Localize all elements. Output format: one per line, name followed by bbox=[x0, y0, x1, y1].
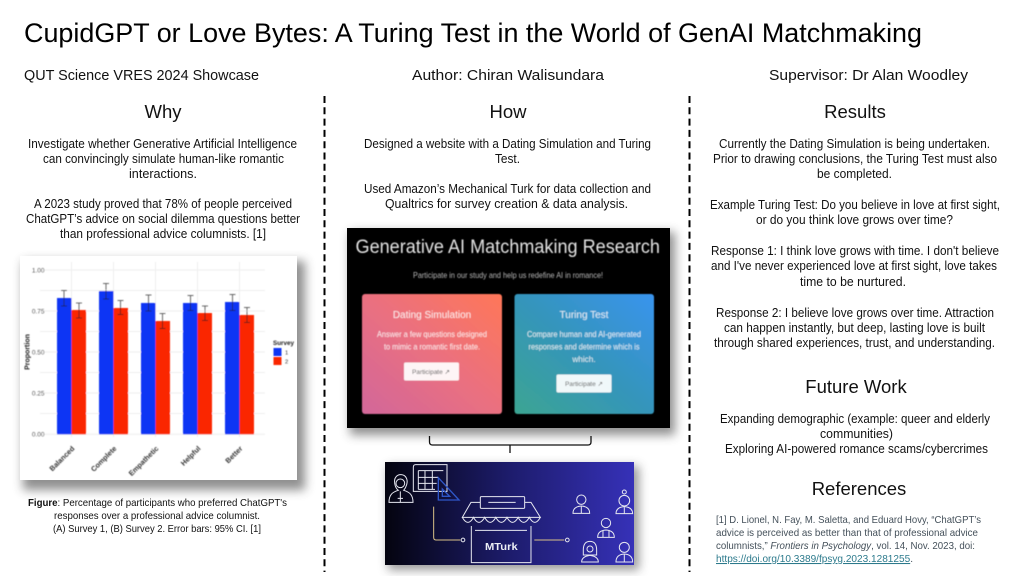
text: reference bbox=[716, 514, 981, 565]
legend: Survey bbox=[273, 340, 295, 347]
x axis labels: Balanced bbox=[47, 444, 76, 473]
connector right bbox=[534, 538, 564, 541]
text: future work bbox=[720, 411, 991, 456]
figure caption: (A) Survey 1, (B) Survey 2. Error bars: 95% CI. [1] bbox=[53, 524, 261, 535]
divider left bbox=[324, 96, 326, 572]
header: showcase: QUT Science VRES 2024 Showcase bbox=[24, 67, 259, 84]
connector left bbox=[434, 507, 460, 540]
text: reference: advice is perceived as better than that of professional advice bbox=[716, 527, 978, 539]
card: turing test: responses and determine which is bbox=[528, 342, 640, 352]
text: results: and I've never experienced love at first sight, love takes bbox=[711, 258, 997, 273]
gridlines bbox=[40, 262, 265, 437]
bars: survey 2 bbox=[72, 308, 254, 434]
header: supervisor: Supervisor: Dr Alan Woodley bbox=[769, 67, 969, 84]
heading: future work: Future Work bbox=[805, 376, 907, 397]
text: future work: communities) bbox=[820, 426, 893, 441]
x axis labels bbox=[47, 444, 245, 478]
card: dating simulation: to mimic a romantic first date. bbox=[384, 342, 480, 352]
card: dating simulation: Answer a few questions designed bbox=[377, 330, 487, 339]
icon: set square bbox=[438, 478, 459, 500]
text: how: Qualtrics for survey creation & data analysis. bbox=[385, 196, 628, 211]
y axis labels: 0.75 bbox=[32, 308, 45, 315]
divider right bbox=[688, 96, 690, 572]
legend: 1 bbox=[285, 350, 288, 356]
x axis labels: Better bbox=[223, 444, 245, 465]
text: why: than professional advice columnists. [1] bbox=[60, 226, 266, 241]
website title: Generative AI Matchmaking Research bbox=[356, 237, 660, 258]
figure caption bbox=[28, 498, 287, 535]
heading: references: References bbox=[812, 478, 906, 499]
y axis labels: 0.50 bbox=[32, 350, 45, 356]
heading: why: Why bbox=[144, 101, 182, 122]
x axis labels: Empathetic bbox=[127, 444, 160, 478]
card: dating simulation: Dating Simulation bbox=[393, 310, 471, 321]
legend bbox=[273, 340, 295, 366]
text: results: Prior to drawing conclusions, the Turing Test must also bbox=[713, 151, 997, 166]
figure caption: Figure: Percentage of participants who preferred ChatGPT's bbox=[28, 498, 287, 509]
x axis labels: Complete bbox=[89, 444, 118, 474]
text: results: Currently the Dating Simulation is being undertaken. bbox=[719, 136, 990, 151]
text: future work: Expanding demographic (example: queer and elderly bbox=[720, 411, 991, 426]
text: results: Response 2: I believe love grows over time. Attraction bbox=[716, 305, 994, 320]
y axis title: Proportion bbox=[24, 334, 32, 370]
card: turing test: Turing Test bbox=[560, 310, 609, 321]
legend: 2 bbox=[285, 360, 288, 366]
bracket bbox=[430, 436, 591, 453]
text: reference: columnists,” Frontiers in Psychology, vol. 14, Nov. 2023, doi: bbox=[716, 540, 975, 552]
text: why: can convincingly simulate human-like romantic bbox=[43, 151, 285, 166]
heading: results: Results bbox=[824, 101, 886, 122]
icon: blueprint bbox=[413, 465, 447, 491]
title: CupidGPT or Love Bytes: A Turing Test in the World of GenAI Matchmaking bbox=[24, 18, 922, 48]
panel: website screenshot bbox=[347, 228, 675, 435]
card: dating simulation: Participate ↗ bbox=[412, 369, 450, 376]
text: why: Investigate whether Generative Artificial Intelligence bbox=[28, 136, 297, 151]
text: results bbox=[710, 136, 1000, 350]
y axis labels: 1.00 bbox=[32, 267, 45, 274]
error bars bbox=[61, 284, 250, 328]
icon: researcher bbox=[389, 475, 413, 502]
card: turing test: Participate ↗ bbox=[565, 381, 603, 388]
text: results: or do you think love grows over time? bbox=[756, 212, 953, 227]
text: results: Response 1: I think love grows with time. I don't believe bbox=[711, 243, 999, 258]
y axis labels: 0.00 bbox=[32, 432, 45, 438]
card: turing test bbox=[514, 294, 654, 414]
text: why: interactions. bbox=[129, 166, 197, 181]
text: results: be completed. bbox=[817, 166, 892, 181]
text: how: Designed a website with a Dating Simulation and Turing bbox=[364, 136, 651, 151]
panel: bar chart bbox=[20, 256, 305, 490]
card: turing test: Compare human and AI-generated bbox=[527, 330, 641, 339]
text: why: ChatGPT’s advice on social dilemma questions better bbox=[26, 211, 301, 226]
header: author: Author: Chiran Walisundara bbox=[412, 67, 605, 84]
text: reference: [1] D. Lionel, N. Fay, M. Saletta, and Eduard Hovy, “ChatGPT’s bbox=[716, 514, 981, 526]
text: how: Used Amazon’s Mechanical Turk for data collection and bbox=[364, 181, 651, 196]
text: results: time to be nurtured. bbox=[800, 274, 906, 289]
heading: how: How bbox=[489, 101, 527, 122]
card: dating simulation bbox=[362, 294, 502, 414]
y axis labels: 0.25 bbox=[32, 390, 45, 398]
bars: survey 1 bbox=[57, 291, 240, 434]
text: reference: https://doi.org/10.3389/fpsyg.2023.1281255. bbox=[716, 553, 913, 565]
website subtitle: Participate in our study and help us redefine AI in romance! bbox=[413, 270, 603, 280]
text: results: Example Turing Test: Do you believe in love at first sight, bbox=[710, 197, 1000, 212]
text: how bbox=[364, 136, 651, 211]
text: why bbox=[26, 136, 301, 241]
x axis labels: Helpful bbox=[179, 444, 202, 468]
y axis labels bbox=[32, 267, 45, 438]
text: future work: Exploring AI-powered romance scams/cybercrimes bbox=[725, 441, 988, 456]
text: how: Test. bbox=[495, 151, 520, 166]
text: results: through shared experiences, trust, and understanding. bbox=[714, 335, 995, 350]
panel: MTurk diagram bbox=[385, 462, 639, 570]
icon: store bbox=[462, 497, 540, 563]
store label: MTurk bbox=[485, 542, 518, 553]
text: why: A 2023 study proved that 78% of people perceived bbox=[34, 196, 292, 211]
figure caption: responses over a professional advice columnist. bbox=[54, 511, 260, 522]
card: turing test: which. bbox=[571, 355, 596, 364]
text: results: can happen instantly, but deep, lasting love is built bbox=[724, 320, 985, 335]
icons: workers bbox=[573, 490, 633, 562]
